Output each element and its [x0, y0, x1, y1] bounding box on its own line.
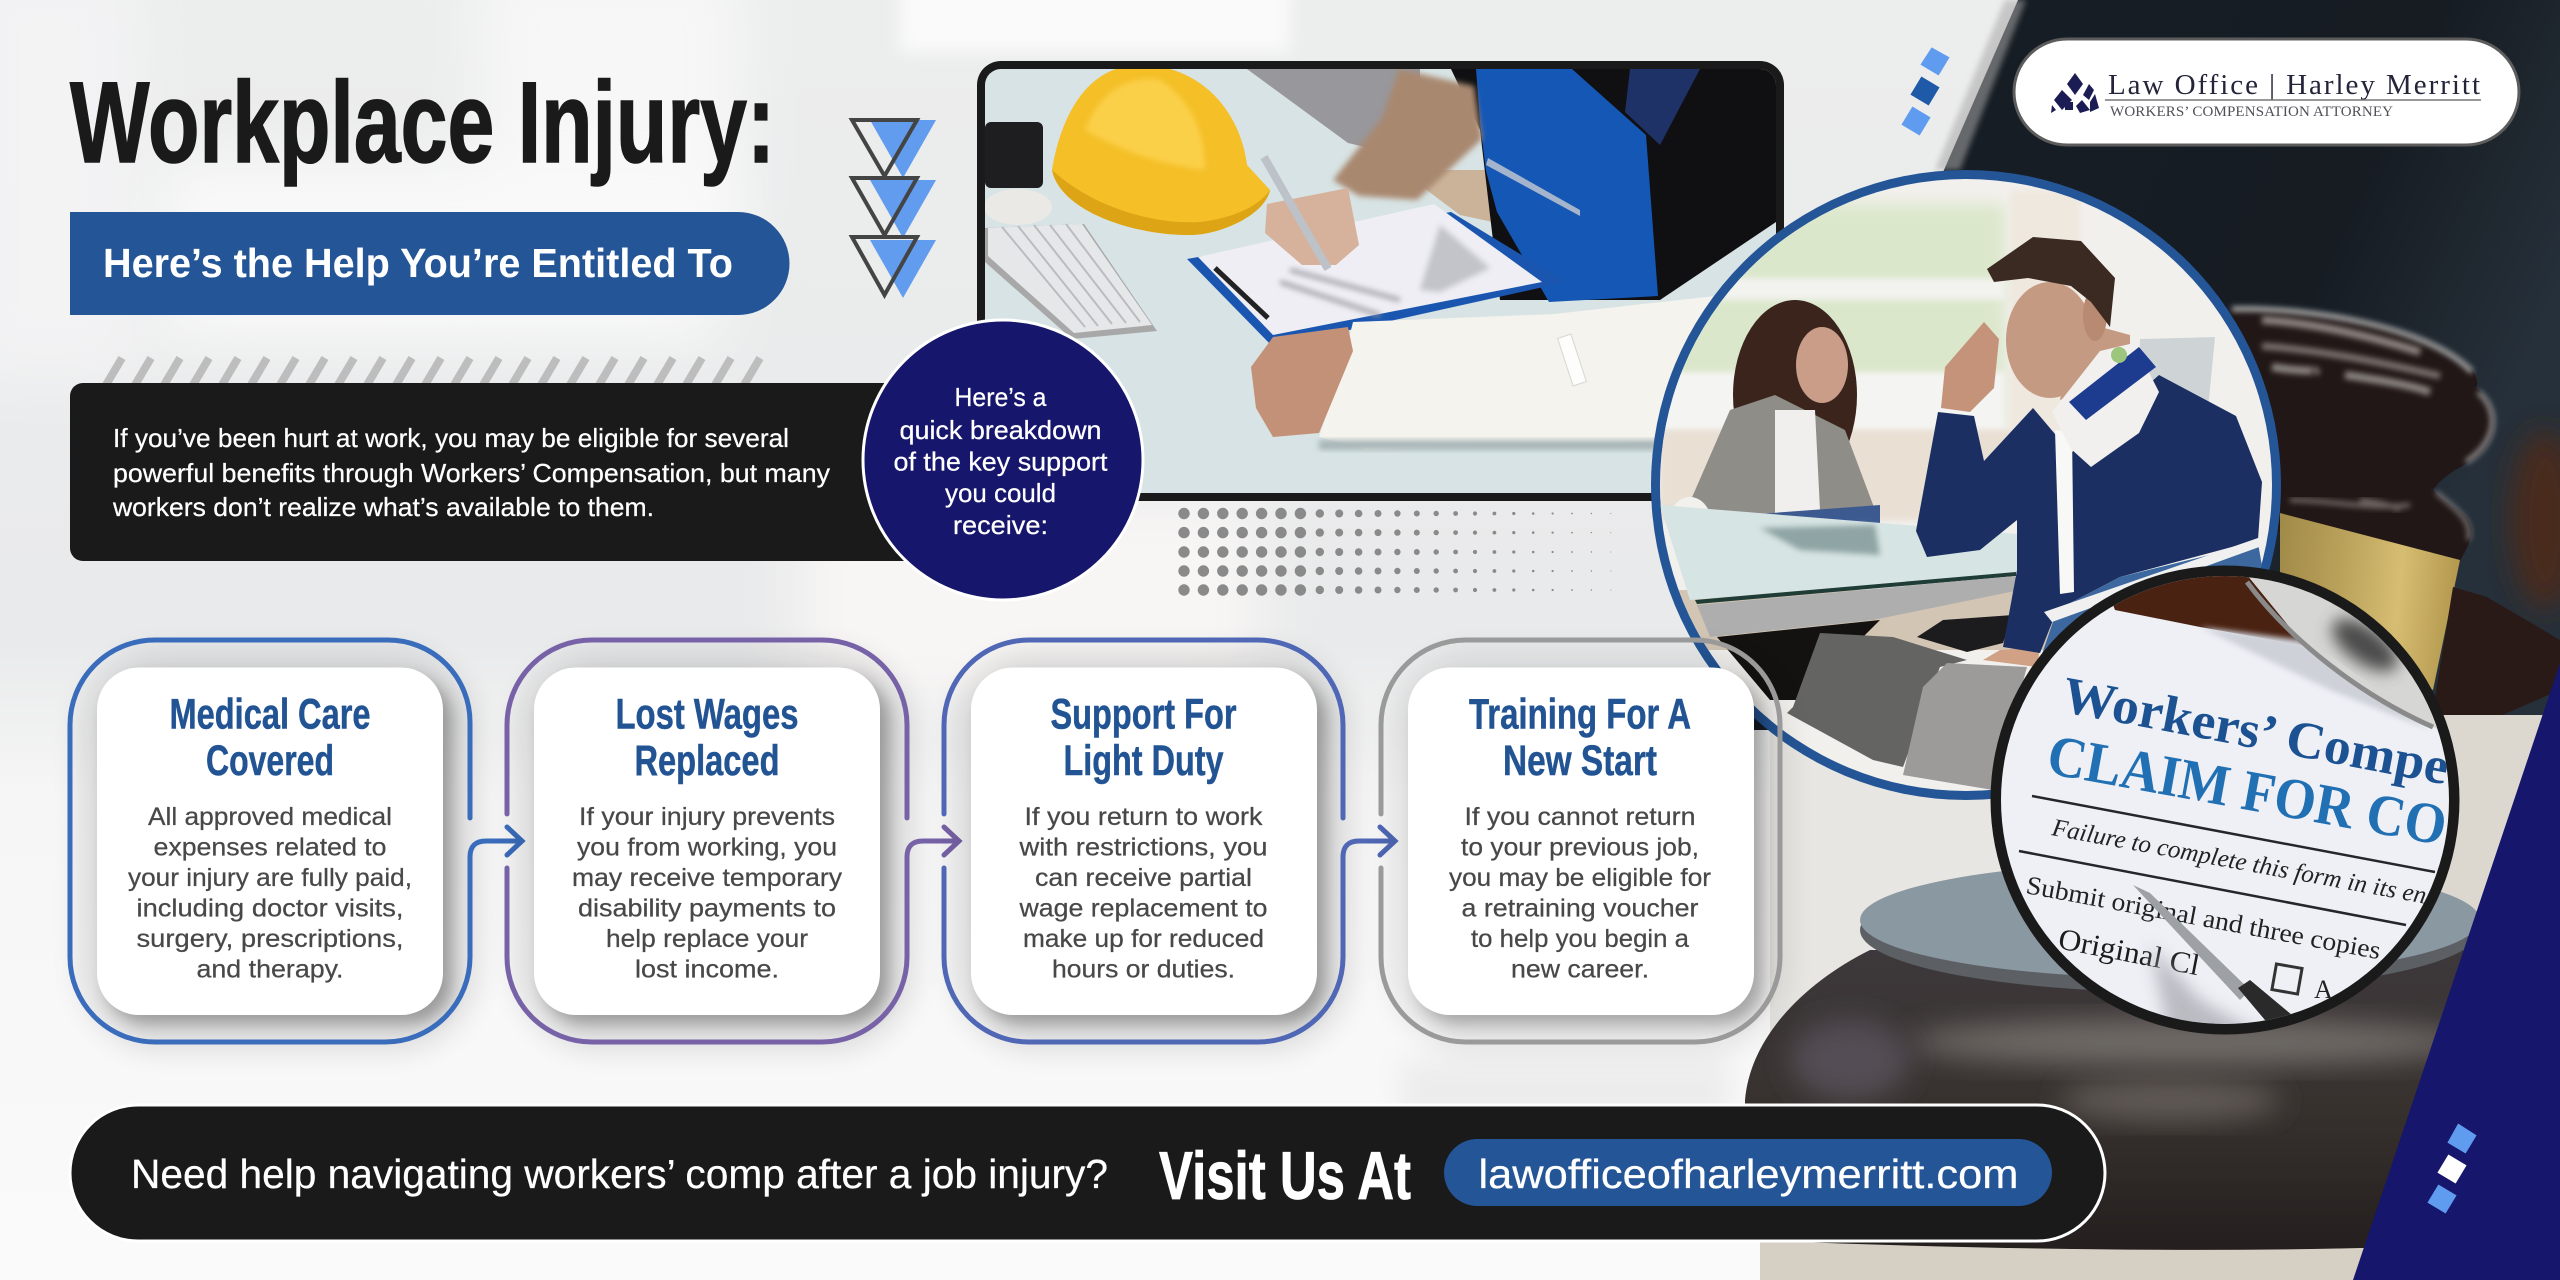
magnified claim form circle: Failure to complete this form in its en: [2049, 814, 2429, 909]
text: lost wages: you from working, you: [577, 834, 837, 862]
magnified claim form circle: CLAIM FOR CO: [2043, 722, 2452, 858]
attorney: [1674, 300, 1880, 523]
magnified claim form circle: Submit original and three copies: [2024, 870, 2383, 965]
icon: diamonds, bottom right: [2424, 1120, 2480, 1217]
desk: [1660, 505, 2060, 700]
card: lost wages: Lost Wages: [616, 690, 798, 738]
background: dark gavel scene: [1700, 0, 2560, 1280]
card: medical care: [70, 640, 522, 1052]
card: new start: Training For A: [1469, 690, 1691, 738]
photo: injured worker filling form: [977, 61, 1784, 501]
pen: [2133, 885, 2291, 1024]
card: lost wages: Replaced: [634, 737, 780, 785]
text: new start: you may be eligible for: [1449, 864, 1711, 892]
logo pill: WORKERS’ COMPENSATION ATTORNEY: [2110, 104, 2393, 120]
website pill: [1444, 1139, 2052, 1206]
callout circle: [863, 320, 1143, 600]
magnified claim form circle: A: [2314, 975, 2333, 1004]
text: light duty: [1018, 803, 1268, 984]
card: medical care: Medical Care: [170, 690, 370, 738]
card: new start: New Start: [1503, 737, 1657, 785]
text: medical care: and therapy.: [196, 956, 344, 984]
card: light duty: [944, 640, 1395, 1052]
text: new start: new career.: [1511, 956, 1649, 984]
intro text panel: powerful benefits through Workers’ Compensation, but many: [113, 458, 830, 488]
magnified claim form circle: [1990, 565, 2460, 1040]
card: lost wages: [507, 640, 959, 1052]
table surface: [1760, 700, 2560, 1280]
website pill: lawofficeofharleymerritt.com: [1478, 1151, 2018, 1197]
decorative navy diagonal corner: [2353, 663, 2560, 1280]
logo pill: Law Office | Harley Merritt: [2108, 69, 2480, 101]
text: light duty: with restrictions, you: [1018, 834, 1268, 862]
text: lost wages: lost income.: [635, 956, 779, 984]
text: medical care: expenses related to: [154, 834, 386, 862]
text: light duty: wage replacement to: [1018, 894, 1268, 922]
arm cast: [1319, 296, 1715, 449]
callout circle: Here’s a: [954, 382, 1047, 412]
text: new start: [1449, 803, 1711, 984]
intro text panel: If you’ve been hurt at work, you may be eligible for several: [113, 423, 789, 453]
title: Workplace Injury:: [70, 59, 775, 187]
card: medical care: Covered: [206, 737, 334, 785]
hatch strip: [106, 358, 760, 385]
card: light duty: Light Duty: [1064, 737, 1224, 785]
clipboard and form: [1187, 204, 1566, 347]
text: new start: If you cannot return: [1464, 803, 1696, 831]
text: light duty: make up for reduced: [1023, 925, 1264, 953]
text: new start: to your previous job,: [1461, 834, 1699, 862]
text: medical care: including doctor visits,: [136, 894, 404, 922]
text: light duty: can receive partial: [1035, 864, 1252, 892]
card: new start: [1381, 640, 1789, 1052]
footer call-to-action bar: [70, 1105, 2105, 1241]
card: light duty: Support For: [1050, 690, 1237, 738]
text: light duty: If you return to work: [1024, 803, 1263, 831]
icon: diamonds, top: [1898, 44, 1953, 139]
panels: four benefit cards: [70, 640, 1789, 1052]
text: light duty: hours or duties.: [1052, 956, 1235, 984]
text: lost wages: help replace your: [606, 925, 808, 953]
icon: stacked triangles: [852, 120, 936, 298]
gavel head: [2230, 307, 2494, 562]
keyboard: [985, 224, 1157, 339]
text: lost wages: disability payments to: [578, 894, 836, 922]
callout circle: quick breakdown: [900, 415, 1102, 445]
gavel handle: [2432, 587, 2560, 716]
intro text panel: [70, 383, 930, 561]
footer call-to-action bar: Need help navigating workers’ comp after a job injury?: [131, 1151, 1108, 1197]
text: medical care: [128, 803, 412, 984]
subtitle pill: [70, 212, 790, 315]
helmet: [1052, 65, 1270, 235]
callout circle: receive:: [953, 510, 1048, 540]
photo circle: man in neck brace with attorney: [1650, 170, 2290, 810]
halftone dots: [1178, 508, 1611, 596]
intro text panel: workers don’t realize what’s available to them.: [112, 492, 654, 522]
footer call-to-action bar: Visit Us At: [1159, 1138, 1411, 1214]
man: [1916, 237, 2262, 654]
sound block: [1745, 862, 2560, 1250]
magnified claim form circle: Original Cl: [2056, 922, 2202, 982]
text: lost wages: may receive temporary: [572, 864, 843, 892]
subtitle pill: Here’s the Help You’re Entitled To: [103, 240, 733, 286]
text: medical care: All approved medical: [148, 803, 392, 831]
text: lost wages: If your injury prevents: [579, 803, 835, 831]
text: medical care: surgery, prescriptions,: [136, 925, 404, 953]
text: medical care: your injury are fully paid,: [128, 864, 412, 892]
gavel brass band: [2280, 513, 2460, 690]
trousers: [1787, 633, 2040, 790]
text: lost wages: [572, 803, 843, 984]
text: new start: to help you begin a: [1471, 925, 1689, 953]
logo pill: [2014, 39, 2519, 145]
icon: logo mark: [2051, 73, 2099, 113]
callout circle: of the key support: [894, 446, 1108, 476]
text: new start: a retraining voucher: [1462, 894, 1698, 922]
callout circle: you could: [945, 478, 1056, 508]
magnified claim form circle: Workers’ Compe: [2058, 667, 2453, 796]
